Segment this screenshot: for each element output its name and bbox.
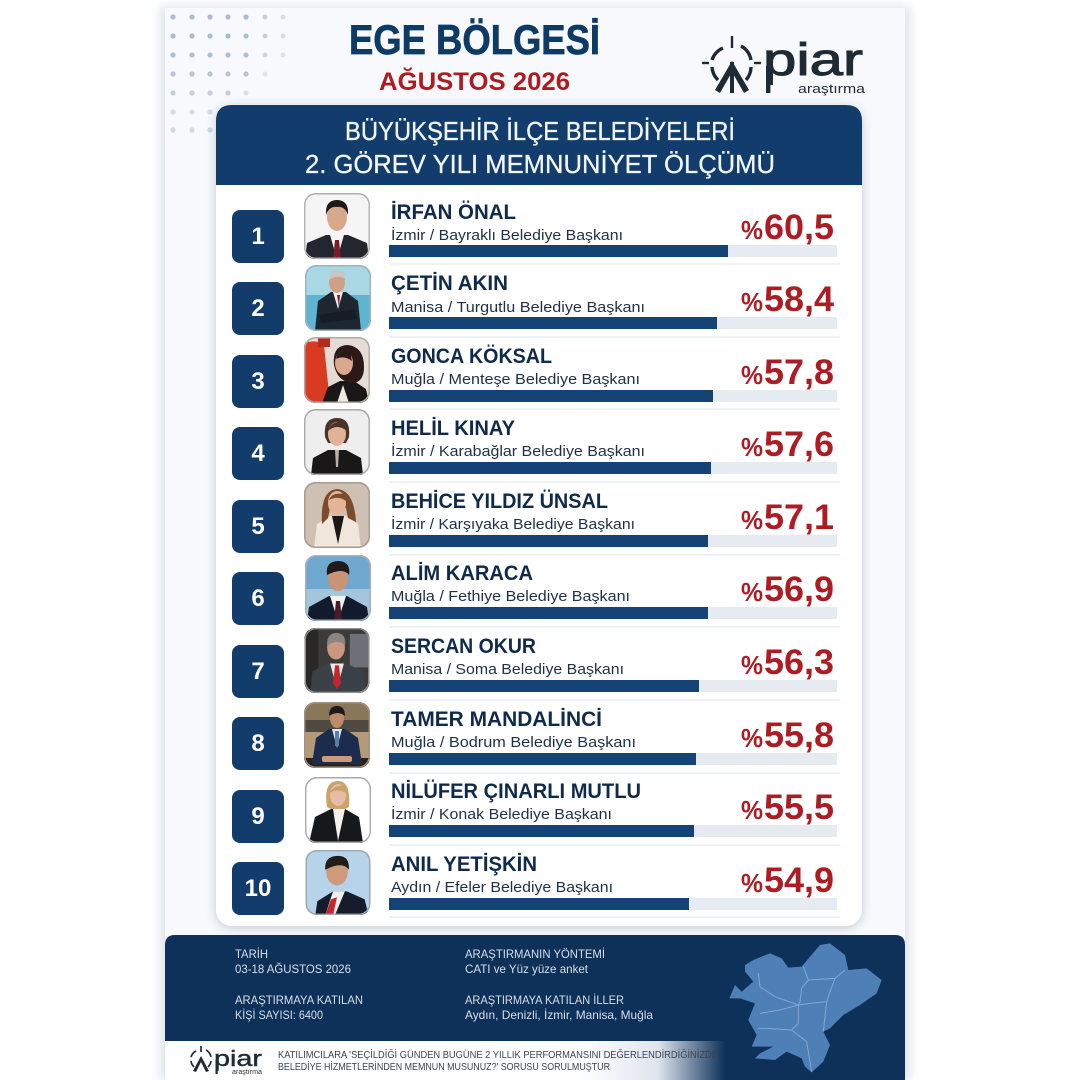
row 8 (232, 702, 837, 770)
bar 6 (389, 607, 837, 619)
rank badge 1: 1 (251, 223, 265, 250)
icon: target and arrow (702, 36, 761, 93)
portrait 8 (304, 702, 370, 768)
row 1 (232, 193, 837, 263)
bar 7 (389, 680, 837, 692)
rank badge 8: 8 (251, 730, 265, 757)
panel: ranking list (216, 105, 862, 926)
role 5: İzmir / Karşıyaka Belediye Başkanı (391, 515, 635, 533)
row 4 (232, 409, 837, 480)
name 6: ALİM KARACA (391, 562, 533, 585)
role 3: Muğla / Menteşe Belediye Başkanı (391, 371, 640, 388)
footer info: provinces (465, 993, 653, 1022)
rank badge 7: 7 (251, 658, 265, 685)
portrait 6 (305, 555, 371, 621)
rank badge 9 (232, 790, 284, 843)
portrait 2 (305, 265, 371, 331)
value 9: 55,5 (764, 788, 834, 827)
footer info: provinces: Aydın, Denizli, İzmir, Manisa, Muğla (465, 1008, 653, 1022)
rank badge 7 (232, 645, 284, 698)
name 9: NİLÜFER ÇINARLI MUTLU (391, 780, 641, 803)
value 4: % (741, 432, 763, 462)
portrait 9 (305, 777, 371, 843)
logo: piar araştırma: araştırma (798, 81, 866, 96)
name 3: GONCA KÖKSAL (391, 345, 552, 368)
survey question text: BELEDİYE HİZMETLERİNDEN MEMNUN MUSUNUZ?' SORUSU SORULMUŞTUR (278, 1060, 610, 1073)
value 6: 56,9 (764, 570, 834, 609)
value 8: 55,8 (764, 716, 834, 755)
bar 1 (389, 245, 837, 257)
footer panel (165, 935, 905, 1080)
value 10: % (741, 868, 763, 898)
row 5 (232, 482, 837, 553)
value 7: 56,3 (764, 643, 834, 682)
value 2: 58,4 (764, 280, 835, 319)
value 4: 57,6 (764, 425, 834, 464)
rank badge 6: 6 (251, 585, 265, 612)
portrait 1 (304, 193, 370, 259)
small logo (191, 1046, 262, 1076)
survey question text (278, 1048, 718, 1073)
footer info: participants: KİŞİ SAYISI: 6400 (235, 1008, 323, 1022)
role 4: İzmir / Karabağlar Belediye Başkanı (391, 442, 645, 460)
value 5: 57,1 (764, 498, 834, 537)
role 8: Muğla / Bodrum Belediye Başkanı (391, 734, 636, 751)
footer info: provinces: ARAŞTIRMAYA KATILAN İLLER (465, 993, 624, 1007)
rank badge 2 (232, 282, 284, 335)
map: Aegean region (729, 943, 882, 1072)
row 2 (232, 265, 837, 335)
name 7: SERCAN OKUR (391, 635, 536, 658)
subtitle: date: AĞUSTOS 2026 (379, 67, 570, 96)
role 2: Manisa / Turgutlu Belediye Başkanı (391, 299, 645, 316)
rank badge 4 (232, 427, 284, 480)
logo: piar araştırma (702, 34, 866, 96)
portrait 5 (304, 482, 370, 548)
value 5: % (741, 505, 763, 535)
footer note strip (165, 1041, 725, 1080)
panel header (216, 105, 862, 185)
role 7: Manisa / Soma Belediye Başkanı (391, 661, 624, 678)
bar 9 (389, 825, 837, 837)
survey question text: KATILIMCILARA 'SEÇİLDİĞİ GÜNDEN BUGÜNE 2 YILLIK PERFORMANSINI DEĞERLENDİRDİĞİNİZDE (278, 1048, 718, 1061)
footer info: participants: ARAŞTIRMAYA KATILAN (235, 993, 363, 1007)
value 7: % (741, 650, 763, 680)
rank badge 3: 3 (251, 368, 265, 395)
title: EGE BÖLGESİ (349, 16, 600, 63)
footer info: method: CATI ve Yüz yüze anket (465, 962, 589, 976)
footer info: date (235, 947, 351, 976)
name 5: BEHİCE YILDIZ ÜNSAL (391, 490, 608, 513)
rank badge 5: 5 (251, 513, 265, 540)
footer info: method: ARAŞTIRMANIN YÖNTEMİ (465, 947, 605, 961)
bar 4 (389, 462, 837, 474)
portrait 3 (304, 337, 370, 403)
panel header: BÜYÜKŞEHİR İLÇE BELEDİYELERİ (345, 116, 735, 146)
bar 5 (389, 535, 837, 547)
role 6: Muğla / Fethiye Belediye Başkanı (391, 588, 630, 605)
small logo: piar (214, 1046, 262, 1071)
footer info: date: TARİH (235, 947, 268, 961)
name 2: ÇETİN AKIN (391, 272, 508, 295)
rank badge 9: 9 (251, 803, 265, 830)
rank badge 1 (232, 210, 284, 263)
footer info: participants (235, 993, 363, 1022)
row 7 (232, 628, 837, 698)
bar 8 (389, 753, 837, 765)
footer info: method (465, 947, 605, 976)
rank badge 4: 4 (251, 440, 265, 467)
rank badge 5 (232, 500, 284, 553)
value 1: 60,5 (764, 208, 834, 247)
bar 2 (389, 317, 837, 329)
role 9: İzmir / Konak Belediye Başkanı (391, 805, 612, 823)
small logo: araştırma (232, 1069, 262, 1076)
row 6 (232, 555, 837, 625)
value 6: % (741, 577, 763, 607)
name 4: HELİL KINAY (391, 417, 515, 440)
rank badge 10 (232, 862, 284, 915)
portrait 7 (304, 628, 370, 693)
bar 10 (389, 898, 837, 910)
name 8: TAMER MANDALİNCİ (391, 708, 602, 731)
page background card (165, 8, 905, 1080)
row 10 (232, 850, 837, 915)
value 2: % (741, 287, 763, 317)
rank badge 6 (232, 572, 284, 625)
role 10: Aydın / Efeler Belediye Başkanı (391, 879, 613, 896)
portrait 4 (304, 409, 370, 475)
logo: piar araştırma: piar (763, 34, 863, 85)
rank badge 8 (232, 717, 284, 770)
row 9 (232, 777, 837, 843)
value 1: % (741, 215, 763, 245)
rank badge 10: 10 (245, 875, 271, 902)
value 9: % (741, 795, 763, 825)
panel header: 2. GÖREV YILI MEMNUNİYET ÖLÇÜMÜ (305, 149, 775, 179)
portrait 10 (306, 850, 370, 915)
value 10: 54,9 (764, 861, 834, 900)
rank badge 3 (232, 355, 284, 408)
row 3 (232, 337, 837, 408)
value 3: 57,8 (764, 353, 834, 392)
name 10: ANIL YETİŞKİN (391, 853, 537, 876)
role 1: İzmir / Bayraklı Belediye Başkanı (391, 226, 623, 244)
value 3: % (741, 360, 763, 390)
value 8: % (741, 723, 763, 753)
name 1: İRFAN ÖNAL (391, 201, 516, 224)
footer info: date: 03-18 AĞUSTOS 2026 (235, 961, 351, 976)
decorative dot pattern (170, 14, 285, 133)
bar 3 (389, 390, 837, 402)
rank badge 2: 2 (251, 295, 265, 322)
